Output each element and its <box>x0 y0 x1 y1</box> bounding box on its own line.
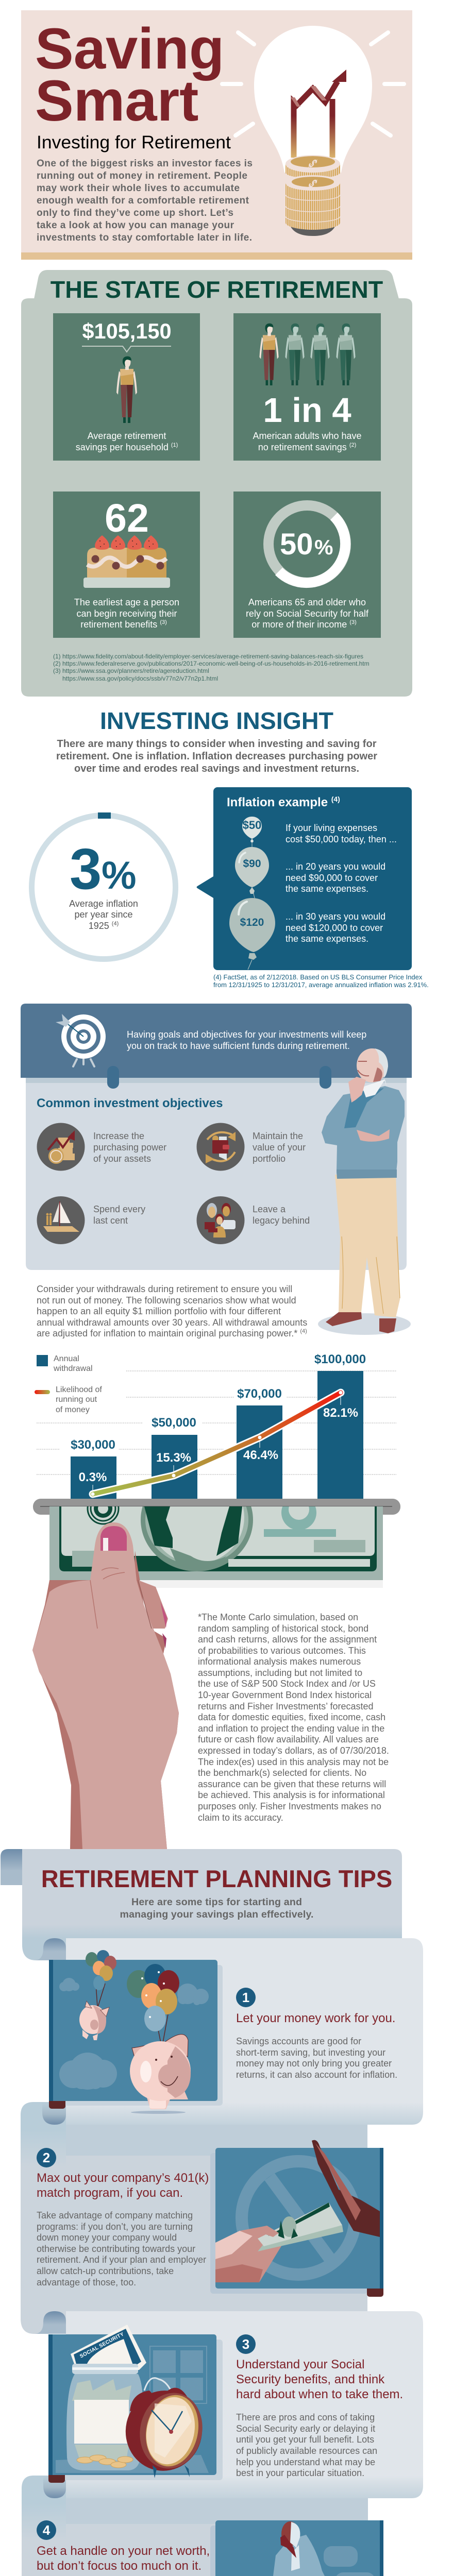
objective: maintain value: value of your <box>253 1142 306 1153</box>
chart: annual withdrawal vs likelihood of running out: 46.4% <box>243 1448 278 1462</box>
heading: Let your money work for you. <box>236 2011 395 2025</box>
body: retirement. And if your plan and employer <box>37 2255 206 2265</box>
body: programs: if you don’t, you are turning <box>37 2222 193 2232</box>
illustration: slot, dollar bill and hand <box>32 1468 400 1849</box>
text: monte carlo disclaimer: returns and Fisher Investments’ forecasted <box>198 1701 373 1711</box>
chart: annual withdrawal vs likelihood of running out <box>35 1352 396 1499</box>
caption: or more of their income <box>251 619 357 630</box>
chart: annual withdrawal vs likelihood of running out: $30,000 <box>71 1438 115 1452</box>
legend: running out <box>56 1395 97 1404</box>
panel: state of retirement <box>21 270 412 697</box>
text: monte carlo disclaimer: and cash returns, allows for the assignment <box>198 1634 377 1645</box>
chart: 3 percent average inflation ring: (4) <box>112 921 119 927</box>
intro text: running out of money in retirement. People <box>37 171 247 181</box>
text: inflation scenario: the same expenses. <box>286 884 368 894</box>
intro text: managing your savings plan effectively. <box>120 1909 313 1920</box>
body: returns, it can also account for inflation. <box>236 2070 397 2080</box>
text: monte carlo disclaimer: expressed in today’s dollars, as of 07/30/2018. <box>198 1745 389 1756</box>
objective: spend every last cent <box>37 1196 145 1244</box>
chart: annual withdrawal vs likelihood of running out: 82.1% <box>323 1406 358 1420</box>
intro text: enough wealth for a comfortable retirement <box>37 195 249 206</box>
text: monte carlo disclaimer: *The Monte Carlo simulation, based on <box>198 1612 358 1622</box>
legend <box>35 1354 102 1414</box>
heading: investing insight: INVESTING INSIGHT <box>100 707 333 734</box>
chart: 3 percent average inflation ring: 3 <box>70 837 102 901</box>
objective: leave a legacy <box>197 1196 310 1244</box>
tip 3 <box>48 2325 403 2483</box>
objective: maintain value: Maintain the <box>253 1131 303 1141</box>
caption: retirement benefits <box>80 619 167 630</box>
text: monte carlo disclaimer: The index(es) used in this analysis may not be <box>198 1757 389 1767</box>
objective: spend every last cent: Spend every <box>93 1204 145 1214</box>
body: short-term saving, but investing your <box>236 2047 385 2058</box>
text: monte carlo disclaimer: of probabilities to various outcomes. This <box>198 1646 366 1656</box>
subtitle: Investing for Retirement <box>37 132 231 152</box>
caption: Americans 65 and older who <box>248 597 366 607</box>
intro text: inflation: There are many things to consider when investing and saving for <box>57 738 377 750</box>
legend: of money <box>56 1405 90 1414</box>
illustration: thinking older man <box>318 1048 411 1335</box>
card: social security reliance <box>233 492 381 638</box>
panel: retirement planning scroll <box>1 1849 423 2576</box>
objective: increase purchasing power: of your assets <box>93 1154 151 1164</box>
body: Savings accounts are good for <box>236 2036 361 2046</box>
heading: Max out your company’s 401(k) <box>37 2171 209 2185</box>
caption: savings per household <box>76 442 178 452</box>
text: consider your withdrawals: are adjusted for inflation to maintain original purchasing power.* <box>37 1328 307 1338</box>
body: until you get your full benefit. Lots <box>236 2434 374 2445</box>
illustration: jar, social security card and clock: SOCIAL SECURITY <box>79 2331 125 2360</box>
number badge: 3 <box>242 2336 249 2352</box>
text: monte carlo disclaimer: be achieved. This analysis is for informational <box>198 1790 385 1800</box>
card: average savings <box>53 313 200 461</box>
chart: 50 percent donut: 50 <box>280 528 313 561</box>
text: monte carlo disclaimer: purposes only. Fisher Investments makes no <box>198 1801 381 1811</box>
caption: can begin receiving their <box>76 608 177 619</box>
text: monte carlo disclaimer: and inflation to project the ending value in the <box>198 1723 384 1734</box>
icon: woman <box>116 357 137 423</box>
icon: light bulb with coins and rising arrow: $ <box>305 177 321 191</box>
chart: 3 percent average inflation ring: Average inflation <box>69 899 138 909</box>
icon: balloons: $120 <box>240 917 264 928</box>
chart: 50 percent donut <box>268 505 346 583</box>
heading: Understand your Social <box>236 2358 364 2371</box>
card: one in four: 1 in 4 <box>263 391 351 430</box>
heading: Get a handle on your net worth, <box>37 2544 210 2558</box>
intro text: only to find they’ve come up short. Let’s <box>37 208 233 218</box>
intro text: inflation: retirement. One is inflation. Inflation decreases purchasing power <box>56 751 377 762</box>
caption: Average retirement <box>88 431 166 441</box>
body: money may not only bring you greater <box>236 2058 392 2069</box>
heading: retirement planning tips: RETIREMENT PLANNING TIPS <box>41 1865 392 1892</box>
icon: target with arrow <box>56 1014 106 1066</box>
chart: annual withdrawal vs likelihood of running out: 15.3% <box>156 1451 191 1465</box>
title: Saving <box>35 16 224 81</box>
text: monte carlo disclaimer: informational analysis makes numerous <box>198 1656 361 1667</box>
caption: (2) <box>349 442 356 448</box>
caption: American adults who have <box>253 431 362 441</box>
chart: 3 percent average inflation ring: % <box>102 854 137 897</box>
text: monte carlo disclaimer: claim to its accuracy. <box>198 1812 283 1823</box>
title <box>35 16 224 133</box>
illustration: worried man on coin stacks <box>223 2521 378 2576</box>
chart: 3 percent average inflation ring: 1925 <box>89 921 119 931</box>
chart: annual withdrawal vs likelihood of running out: $100,000 <box>314 1352 366 1366</box>
body: help you understand what may be <box>236 2457 375 2467</box>
text: monte carlo disclaimer: data for domestic equities, fixed income, cash <box>198 1712 385 1722</box>
icon: light bulb with coins and rising arrow: $ <box>305 157 321 171</box>
text: monte carlo disclaimer: assumptions, including but not limited to <box>198 1668 362 1678</box>
chart: annual withdrawal vs likelihood of running out: 0.3% <box>79 1470 107 1484</box>
footnotes: sources: (3) https://www.ssa.gov/planners/retire/agereduction.html <box>53 667 209 674</box>
legend: Likelihood of <box>56 1385 102 1394</box>
number badge <box>236 2334 256 2354</box>
text: monte carlo disclaimer: the use of S&P 500 Stock Index and /or US <box>198 1679 376 1689</box>
panel: inflation example <box>197 787 412 970</box>
intro text: One of the biggest risks an investor faces is <box>37 158 253 169</box>
text: inflation scenario: the same expenses. <box>286 934 368 944</box>
icon: four women <box>259 324 356 385</box>
text: monte carlo disclaimer: 10-year Government Bond Index historical <box>198 1690 372 1700</box>
chart: annual withdrawal vs likelihood of running out: $70,000 <box>237 1387 282 1401</box>
objective: leave a legacy: legacy behind <box>253 1215 310 1226</box>
caption: (3) <box>160 619 167 625</box>
heading: Security benefits, and think <box>236 2372 385 2386</box>
caption: The earliest age a person <box>74 597 179 607</box>
number badge <box>37 2520 56 2540</box>
intro text: investments to stay comfortable later in life. <box>37 232 252 243</box>
illustration: hand refusing money <box>215 2140 380 2282</box>
caption: (1) <box>171 442 178 448</box>
icon: light bulb with coins and rising arrow <box>222 26 404 236</box>
tip 1 <box>49 1950 397 2114</box>
text: monte carlo disclaimer: random sampling of historical stock, bond <box>198 1623 368 1634</box>
icon: hand <box>32 1522 179 1849</box>
text: consider your withdrawals: Consider your withdrawals during retirement to ensure you will <box>37 1284 292 1294</box>
panel: investment objectives <box>21 1004 412 1270</box>
text: inflation scenario: ... in 30 years you would <box>286 911 385 922</box>
body: down money your company would <box>37 2232 177 2243</box>
text: monte carlo disclaimer: future or cash flow availability. All values are <box>198 1734 379 1744</box>
text: consider your withdrawals: annual withdrawal amounts over 30 years. All withdrawal amounts <box>37 1317 307 1328</box>
illustration: piggy banks with balloons <box>59 1950 209 2114</box>
footnotes: sources: https://www.ssa.gov/policy/docs/ssb/v77n2/v77n2p1.html <box>62 675 218 682</box>
chart: 3 percent average inflation ring <box>32 812 175 959</box>
body: There are pros and cons of taking <box>236 2412 375 2422</box>
body: allow catch-up contributions, take <box>37 2266 174 2276</box>
objective: maintain value: portfolio <box>253 1154 286 1164</box>
heading: but don’t focus too much on it. <box>37 2559 202 2573</box>
tip 4 <box>37 2520 383 2576</box>
objective: leave a legacy: Leave a <box>253 1204 286 1214</box>
heading: common investment objectives: Common investment objectives <box>37 1096 223 1110</box>
footnotes: sources: (1) https://www.fidelity.com/about-fidelity/employer-services/average-retirement-saving-balances-reach-six-figures <box>53 653 363 660</box>
card: average savings: $105,150 <box>82 319 172 343</box>
footnote: factset: (4) FactSet, as of 2/12/2018. Based on US BLS Consumer Price Index <box>213 973 423 981</box>
chart: 3 percent average inflation ring: per year since <box>74 909 133 920</box>
card: one in four <box>233 313 381 461</box>
intro text: may work their whole lives to accumulate <box>37 183 240 194</box>
text: inflation scenario: need $90,000 to cover <box>286 873 378 883</box>
text: monte carlo disclaimer: assurance can be given that these returns will <box>198 1779 386 1789</box>
objective: increase purchasing power: purchasing power <box>93 1142 166 1153</box>
heading: (4) <box>331 795 340 803</box>
icon: balloons <box>229 817 275 970</box>
objective: maintain value <box>197 1123 306 1171</box>
legend: Annual <box>54 1354 79 1363</box>
intro text: take a look at how you can manage your <box>37 220 234 231</box>
body: of publicly available resources can <box>236 2446 377 2456</box>
objective: increase purchasing power <box>37 1123 166 1171</box>
objective: spend every last cent: last cent <box>93 1215 128 1226</box>
text: consider your withdrawals: happen to an all equity $1 million portfolio with four different <box>37 1306 281 1316</box>
caption: (3) <box>349 619 357 625</box>
number badge <box>37 2148 56 2167</box>
body: otherwise be contributing towards your <box>37 2244 195 2254</box>
title: Smart <box>35 69 198 133</box>
footnote: factset: from 12/31/1925 to 12/31/2017, average annualized inflation was 2.91%. <box>213 981 429 989</box>
text: consider your withdrawals: (4) <box>300 1328 307 1334</box>
footnotes: sources: (2) https://www.federalreserve.gov/publications/2017-economic-well-being-of-us-households-in-2016-retirement.htm <box>53 660 370 667</box>
heading: Inflation example <box>227 795 328 809</box>
chart: annual withdrawal vs likelihood of running out: $50,000 <box>152 1416 196 1430</box>
intro text: Here are some tips for starting and <box>131 1896 302 1908</box>
number badge: 1 <box>242 1990 249 2005</box>
heading: THE STATE OF RETIREMENT <box>51 276 383 303</box>
card: earliest age: 62 <box>105 496 149 540</box>
heading: hard about when to take them. <box>236 2387 403 2401</box>
text: consider your withdrawals: not run out of money. The following scenarios show what would <box>37 1295 296 1306</box>
text: inflation scenario: ... in 20 years you would <box>286 861 385 872</box>
icon: cake <box>83 535 170 588</box>
icon: dollar bill <box>49 1506 383 1580</box>
legend: withdrawal <box>53 1364 93 1373</box>
icon: balloons: $90 <box>243 858 261 870</box>
number badge <box>236 1988 256 2007</box>
body: best in your particular situation. <box>236 2468 364 2478</box>
caption: rely on Social Security for half <box>246 608 369 619</box>
body: advantage of those, too. <box>37 2277 136 2287</box>
number badge: 2 <box>43 2150 50 2165</box>
text: goals: Having goals and objectives for your investments will keep <box>127 1029 366 1040</box>
text: monte carlo disclaimer: the benchmark(s) selected for clients. No <box>198 1768 366 1778</box>
body: Social Security early or delaying it <box>236 2424 375 2434</box>
text: inflation scenario: cost $50,000 today, then ... <box>286 834 397 844</box>
heading: match program, if you can. <box>37 2186 183 2200</box>
icon: balloons: $50 <box>243 819 261 832</box>
intro text: inflation: over time and erodes real savings and investment returns. <box>74 763 359 774</box>
panel: hero <box>21 10 412 260</box>
text: goals: you on track to have sufficient funds during retirement. <box>127 1041 350 1051</box>
tip 2 <box>37 2140 383 2297</box>
card: earliest age <box>53 492 200 638</box>
chart: 50 percent donut: % <box>314 535 333 559</box>
text: inflation scenario: If your living expenses <box>286 823 377 833</box>
body: Take advantage of company matching <box>37 2210 193 2221</box>
objective: increase purchasing power: Increase the <box>93 1131 144 1141</box>
number badge: 4 <box>43 2522 51 2538</box>
illustration: jar, social security card and clock <box>56 2325 210 2478</box>
text: inflation scenario: need $120,000 to cover <box>286 923 383 933</box>
caption: no retirement savings <box>258 442 356 452</box>
